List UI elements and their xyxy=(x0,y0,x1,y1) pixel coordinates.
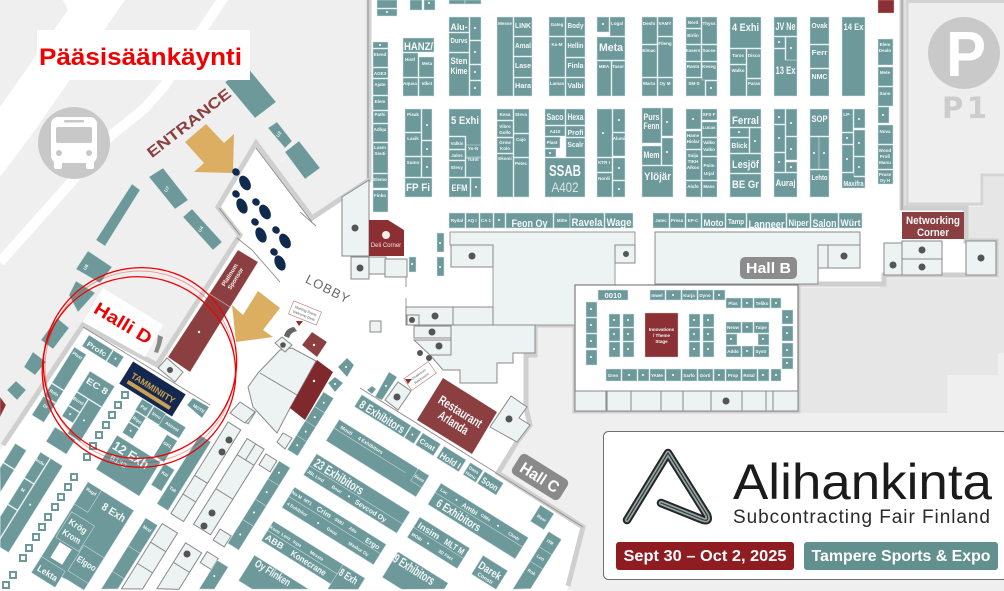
deli corner xyxy=(369,220,404,256)
hall C booths: Darek xyxy=(476,560,504,583)
hall C booths: 6 Exhibitors xyxy=(434,496,484,535)
restaurant arlanda xyxy=(417,378,497,454)
lobby label: LOBBY xyxy=(303,271,353,307)
Hall A top booths: Gateg xyxy=(551,22,564,27)
Hall A top booths: Oy H xyxy=(880,178,890,183)
lobby signs: Welcome Desk xyxy=(292,310,316,322)
hall C booths: SMU xyxy=(334,517,345,526)
Hall A top booths: Paras xyxy=(748,81,761,86)
hall C booths: Rexr xyxy=(536,514,547,523)
Hall A lower booths: Saija xyxy=(688,153,699,158)
Hall A top booths: Lase xyxy=(515,63,531,70)
hall D booths: Reln xyxy=(49,388,60,398)
arrow: entrance xyxy=(185,124,234,173)
outdoor teal stands xyxy=(0,68,320,417)
Hall A lower booths: Valko xyxy=(703,140,715,145)
hall C booths: 23 Exhibitors xyxy=(311,455,367,498)
Hall A lower booths: Fenn xyxy=(644,121,660,131)
hall C booths: Maskur Oy xyxy=(348,541,370,557)
hall b label xyxy=(740,257,797,279)
hall C booths: No M xyxy=(291,490,303,500)
Hall A top booths: Idkct xyxy=(422,81,433,86)
hall b lower room: Taipe xyxy=(755,325,767,330)
entrance label: ENTRANCE xyxy=(144,85,235,161)
outdoor teal stands: U4 xyxy=(197,225,205,233)
hall b lower room: Neuw xyxy=(727,325,739,330)
hall b lower room: Inwel xyxy=(651,293,663,298)
subtitle: Subcontracting Fair Finland xyxy=(733,507,990,528)
Hall A lower booths: Jalos xyxy=(451,153,463,158)
hall b lower room: 0010 xyxy=(604,293,622,300)
Hall A lower booths: Maxifra xyxy=(844,181,864,188)
hall D booths: Lekta xyxy=(35,563,60,584)
hall C booths: Soon xyxy=(480,475,500,493)
Hall A lower booths: Pisak xyxy=(407,112,419,117)
hall D booths: Pal xyxy=(140,404,148,412)
Hall A lower booths: Grow xyxy=(499,140,511,145)
hall c label: Hall C xyxy=(516,460,562,497)
Hall A lower booths xyxy=(405,108,865,197)
Hall A top booths: Etend xyxy=(374,52,386,57)
Hall A lower booths: Yo-N xyxy=(468,146,478,151)
restaurant arlanda: Restaurant xyxy=(436,392,486,431)
icon: parking P xyxy=(928,17,1000,90)
Hall A top booths: Thyss xyxy=(702,21,716,26)
hall b lower room: Gorti xyxy=(700,373,710,378)
Hall A lower booths: KTR I xyxy=(598,160,610,165)
hall b label: Hall B xyxy=(746,260,791,277)
hall b lower room: Addo xyxy=(727,349,739,354)
hall C booths: 4 Exhibitors xyxy=(356,436,384,456)
Hall A top booths xyxy=(373,0,894,212)
hall bottom row booths: Presa xyxy=(671,218,684,223)
Hall A top booths: Pathi xyxy=(374,112,386,117)
Hall A lower booths: Sumo xyxy=(407,160,419,165)
Hall A lower booths: Scalr xyxy=(568,142,584,149)
light rooms: Hall A south xyxy=(406,232,996,383)
Hall A lower booths: EFM xyxy=(452,183,468,193)
Hall A top booths: Meta xyxy=(422,61,433,66)
hall b lower room: Stage xyxy=(655,339,668,344)
hall b lower room: Kurja xyxy=(683,293,695,298)
Hall A top booths: Hara xyxy=(515,83,531,90)
Hall A lower booths: Blick xyxy=(732,143,748,150)
hall C booths: Constr xyxy=(476,572,495,587)
hall D booths: GKL xyxy=(162,440,173,450)
hall D booths: Kai xyxy=(161,470,169,478)
logo: triangle mark xyxy=(627,453,708,520)
Hall A top booths: Fileng xyxy=(658,41,672,46)
hall C booths: CIMs xyxy=(480,512,492,523)
Hall A top booths: Keseg xyxy=(702,64,716,69)
Hall A top booths: Easers xyxy=(686,48,701,53)
Hall A top booths: 13 Ex xyxy=(776,65,796,77)
hall C and D booths (rotated grid) xyxy=(0,251,571,591)
hall C booths: Hanu xyxy=(465,470,477,480)
Hall A top booths: NMC xyxy=(812,74,828,81)
hall D and C light rooms xyxy=(121,401,295,591)
hall D booths: Ragd xyxy=(85,487,98,497)
Hall A top booths: Wood xyxy=(879,148,891,153)
service icons in hall D rooms xyxy=(184,436,232,558)
Hall A top booths: Adlqu xyxy=(374,127,387,132)
arrow: into lobby xyxy=(232,291,280,342)
Hall A top booths: Profi xyxy=(880,154,890,159)
Hall A lower booths: Poim xyxy=(703,163,715,168)
Hall A top booths: Lamas xyxy=(550,81,565,86)
outdoor teal stands: U2 xyxy=(275,130,283,138)
hall D small square stands xyxy=(3,392,128,588)
hall bottom row booths: Lanneer xyxy=(748,219,785,231)
hall bottom row booths: Würt xyxy=(840,218,860,228)
hall C booths: Ergo xyxy=(363,537,381,552)
Hall A top booths: HANZ/ xyxy=(404,41,433,53)
hall C booths: Dass xyxy=(468,465,480,475)
Hall A lower booths: 5 Exhi xyxy=(451,115,479,127)
Hall A lower booths: Auraj xyxy=(776,178,796,188)
hall C booths: 8 Exhibitors xyxy=(357,397,408,436)
badge: dates: Sept 30 – Oct 2, 2025 xyxy=(624,548,787,565)
Hall A top booths: Birlin xyxy=(687,33,699,38)
logo: Tamminiity xyxy=(119,362,186,416)
hall D booths: Ripp xyxy=(132,415,143,425)
Hall A top booths: Taros xyxy=(732,53,744,58)
hall D booths: Elgoo xyxy=(75,554,98,574)
lobby signs xyxy=(288,301,436,390)
lobby signs: Meeting Points xyxy=(294,305,317,317)
Hall A top booths: Mete xyxy=(880,70,891,75)
Hall A top booths: 4 Exhi xyxy=(732,22,759,34)
Hall A lower booths: BE Gr xyxy=(732,179,760,191)
hall bottom row booths: Salon xyxy=(812,218,837,230)
lobby teal booths xyxy=(409,233,444,276)
Hall A lower booths: Lehto xyxy=(812,175,828,182)
Hall A top booths: Lasm xyxy=(374,145,386,150)
inner wall lines xyxy=(83,0,902,527)
hall C booths: Goua xyxy=(326,526,339,537)
Hall A top booths: Ka-M xyxy=(552,42,563,47)
hall D booths: M xyxy=(20,487,26,493)
hall D booths: Profc xyxy=(85,341,108,359)
Hall A top booths: Manu xyxy=(879,160,891,165)
hall D booths: EC 8 xyxy=(84,376,110,397)
roads xyxy=(0,0,1004,413)
Hall A top booths: Sacse xyxy=(702,48,716,53)
hall D booths: Dr xyxy=(42,403,49,410)
hall bottom row booths: Niper xyxy=(788,218,809,228)
hall c label xyxy=(510,452,570,502)
Hall A top booths: Sten xyxy=(450,56,468,66)
hall D booths: Almost xyxy=(164,420,180,433)
Hall A lower booths: Hexa xyxy=(568,112,584,122)
hall C booths: Inpa xyxy=(292,539,303,548)
hall D booths: Krom xyxy=(60,527,83,546)
hall C booths: 3D Fact xyxy=(437,549,454,562)
Hall A lower booths: Lucas xyxy=(702,125,716,130)
Hall A top booths: Ferr xyxy=(812,50,828,57)
lobby signs: Restrooms xyxy=(414,372,430,385)
hall C booths: Lenz xyxy=(280,532,292,542)
Hall A top booths: Hiotl xyxy=(405,57,415,62)
Hall A lower booths: FP Fi xyxy=(406,182,430,194)
Hall A top booths: Oy M xyxy=(659,81,671,86)
Hall A top booths: Nova xyxy=(879,129,891,134)
hall C booths: Clwdr xyxy=(507,531,521,542)
hall b lower room: Rotal xyxy=(743,373,755,378)
hall D booths: Inno xyxy=(151,411,162,420)
Hall A lower booths: Nordi xyxy=(598,176,610,181)
hall bottom row booths: Mitte xyxy=(557,218,568,223)
Hall A lower booths: Hiolar xyxy=(687,139,700,144)
Hall A lower booths: Alumi xyxy=(613,136,625,141)
Hall A top booths: 14 Ex xyxy=(844,22,864,32)
parking label P1: P 1 xyxy=(942,91,987,125)
Hall A top booths: LINK xyxy=(515,23,531,30)
hall C booths: MOBi xyxy=(410,532,423,542)
lobby signs: Cloakroom xyxy=(411,368,427,381)
Hall A lower booths: SSAB xyxy=(549,163,581,180)
parking area outline xyxy=(907,2,1004,204)
Hall A top booths: AGE3 xyxy=(374,71,387,76)
Hall A top booths: Elemo xyxy=(373,177,387,182)
Hall A lower booths: A402 xyxy=(552,179,579,195)
Hall A top booths: VAMY xyxy=(659,21,671,26)
hall C booths: Insim xyxy=(416,520,442,542)
hall C booths: ABB xyxy=(263,532,286,552)
hall bottom row booths: Rydal xyxy=(451,218,463,223)
networking corner: Networking xyxy=(906,215,960,227)
hall C booths: MLT M xyxy=(442,537,466,557)
hall C booths: JBL Lind xyxy=(306,469,325,483)
hall C booths xyxy=(215,376,571,591)
lobby central block xyxy=(158,327,316,449)
outdoor teal stands: U8 xyxy=(82,263,90,271)
Hall A top booths: Rants xyxy=(687,64,700,69)
Hall A lower booths: Petec xyxy=(515,161,527,166)
Hall A lower booths: Purs xyxy=(644,112,660,122)
hall bottom row booths: Jatec xyxy=(655,218,667,223)
badge: venue: Tampere Sports & Expo xyxy=(812,548,990,565)
logo: Tamminiity: TAMMINIITY xyxy=(129,371,177,406)
hall bottom row booths: CA 1 xyxy=(481,218,492,223)
label: main entrance: Pääsisäänkäynti xyxy=(39,44,242,71)
badge: venue xyxy=(804,542,998,570)
Hall A lower booths: Mem xyxy=(644,150,660,160)
hall D booths: 8 Exh xyxy=(99,501,128,525)
badge: dates xyxy=(616,542,794,570)
hall C booths: Allo xyxy=(348,526,358,534)
hall b lower room: Gren xyxy=(608,373,618,378)
Hall A lower booths: Plast xyxy=(547,140,558,145)
MOTE stand xyxy=(187,398,209,418)
hall C booths: Konecrane xyxy=(289,548,328,578)
Hall A top booths: Walko xyxy=(731,68,745,73)
Hall A lower booths: A410 xyxy=(550,129,561,134)
hall D booths: B132 xyxy=(108,455,128,470)
Hall A lower booths: Steva xyxy=(515,112,527,117)
Hall A lower booths: Turol xyxy=(468,157,478,162)
MOTE stand: MOTE xyxy=(192,403,206,414)
Hall A top booths: Alu- xyxy=(450,22,468,32)
hall C booths: Kone xyxy=(269,525,282,535)
Hall A top booths: Valbi xyxy=(568,83,584,90)
Hall A top booths: Meta xyxy=(599,42,624,54)
hall D booths: Bond xyxy=(72,396,85,406)
Hall A lower booths: Laxik xyxy=(407,136,419,141)
icon: parking P: P xyxy=(946,18,986,90)
hall C booths: Rok xyxy=(527,568,537,577)
label: Halli D xyxy=(83,288,163,357)
hall C booths: 4 Exhibitor xyxy=(286,501,309,518)
Hall A lower booths: LP- xyxy=(843,112,851,117)
Hall A top booths: JV Ne xyxy=(776,21,796,33)
Hall A lower booths: Ekomi xyxy=(498,156,512,161)
Hall A lower booths: Ferral xyxy=(732,115,759,127)
brown stands in lobby xyxy=(168,250,333,420)
Hall A top booths: Seuti xyxy=(374,151,386,156)
Hall A top booths: Finla xyxy=(568,63,584,70)
Hall A lower booths: Gollo xyxy=(499,130,511,135)
Hall A top booths: Amal xyxy=(515,43,531,50)
hall b lower room: Innovations xyxy=(649,327,675,332)
Hall A top booths: Pruse xyxy=(879,172,892,177)
Hall A lower booths: Kolo xyxy=(500,146,510,151)
hall bottom row booths: Moto xyxy=(704,218,724,228)
hall bottom row booths: Feon Oy xyxy=(512,218,548,230)
Hall A lower booths: Ylöjär xyxy=(644,171,672,183)
Hall A lower booths: Lesjöf xyxy=(732,159,759,171)
lobby south-east rooms and booths xyxy=(328,358,530,442)
hall b lower room: Prop xyxy=(728,373,738,378)
hall b lower room: Plas xyxy=(728,301,738,306)
Hall A top booths: Finko xyxy=(374,193,386,198)
Hall A lower booths: Vibro xyxy=(499,124,511,129)
restaurant arlanda: Arlanda xyxy=(436,407,472,438)
brown stands in lobby: Platinum xyxy=(221,263,240,288)
Hall A top booths: Deshi xyxy=(643,21,655,26)
hall C booths: Hold I xyxy=(438,450,463,471)
hall C booths: Leo xyxy=(536,553,546,562)
title: Alihankinta: Alihankinta xyxy=(733,454,992,510)
hall bottom row booths: Ravela xyxy=(572,217,603,229)
hall b lower room: / Theme xyxy=(653,333,670,338)
hall C booths: ITR xyxy=(546,538,555,547)
hall bottom row booths: Tamp xyxy=(728,219,744,226)
hall bottom row booths xyxy=(449,213,862,231)
Hall A top booths: Nord xyxy=(688,20,698,25)
Hall A lower booths: Hame xyxy=(687,133,700,138)
light rooms: lobby north xyxy=(342,180,407,332)
hall D booths: Mod xyxy=(142,524,153,534)
hall D booths: Plast xyxy=(71,351,84,361)
deli corner: Deli Corner xyxy=(371,243,401,249)
Hall A top booths: Durvs xyxy=(450,38,468,45)
hall bottom row booths: EP-C xyxy=(688,218,699,223)
label: main entrance xyxy=(37,30,250,80)
Hall A lower booths: SFS F xyxy=(703,112,716,117)
Hall A lower booths: Kesa xyxy=(500,112,511,117)
hall b lower room xyxy=(575,285,798,411)
Hall A top booths: Hellin xyxy=(568,43,584,50)
outdoor teal stands: U1 xyxy=(279,155,287,163)
hall b lower room: Systr xyxy=(755,349,767,354)
Hall A top booths: Logal xyxy=(611,21,623,26)
hall bottom row booths: AQ I xyxy=(467,218,477,223)
Hall A lower booths: Valkis xyxy=(451,141,464,146)
Hall A lower booths: SOP xyxy=(812,114,828,124)
hall C booths: Crim xyxy=(315,506,332,520)
hall C booths: MT1 xyxy=(303,497,313,507)
Hall A lower booths: Alufo xyxy=(687,184,699,189)
outdoor teal stands: U7 xyxy=(163,185,171,193)
panel: event info xyxy=(604,432,1004,580)
Hall A top booths: Messe xyxy=(498,21,512,26)
Hall A top booths: Ovak xyxy=(812,23,828,30)
hall b lower room: YAMe xyxy=(651,373,664,378)
hall C booths: Bouc xyxy=(331,484,343,495)
hall D booths: Tak xyxy=(168,485,178,494)
hall b lower room: Teliko xyxy=(756,301,769,306)
hall b lower room: Dyno xyxy=(699,293,711,298)
Hall A top booths: Body xyxy=(568,23,584,30)
Hall A top booths: Dealo xyxy=(879,48,891,53)
hall D booths: 12 Exh xyxy=(110,438,152,472)
Hall A top booths: Warta xyxy=(643,81,656,86)
brown stands in lobby: Sponsor xyxy=(227,267,246,291)
label: Halli D: Halli D xyxy=(90,298,156,348)
Hall A top booths: MBA xyxy=(599,64,610,69)
hall C booths: Mouti xyxy=(339,425,354,437)
hall C booths: Ambi xyxy=(460,502,479,517)
Hall A top booths: Disco xyxy=(748,53,760,58)
hall bottom row booths: Wage xyxy=(606,217,632,229)
icon: bus xyxy=(38,107,110,179)
hall D booths: Krög xyxy=(67,517,89,536)
Hall A lower booths: Saco xyxy=(546,112,564,122)
hall C booths: Sova xyxy=(413,473,426,484)
hall C booths: Coat xyxy=(418,438,437,453)
hall C booths: Loc xyxy=(439,487,449,496)
Hall A lower booths: Elevy xyxy=(451,165,463,170)
Hall A top booths: Tasor xyxy=(612,64,624,69)
hall C booths: Sevcod Oy xyxy=(353,499,388,524)
Hall A lower booths: Cajo xyxy=(516,137,526,142)
Hall A top booths: Elmac xyxy=(642,48,656,53)
icon: footprints xyxy=(231,167,293,272)
hall D booths: Indu xyxy=(35,457,46,467)
hall C booths: Messte xyxy=(309,550,325,562)
Hall A top booths: Sano xyxy=(879,91,891,96)
Hall A lower booths: Valko xyxy=(703,147,715,152)
networking corner: Corner xyxy=(917,227,950,239)
Hall A top booths: SM-S xyxy=(688,81,700,86)
networking corner xyxy=(902,212,964,239)
Hall A top booths: Kime xyxy=(450,66,468,76)
hall b lower room: Sarfo xyxy=(683,373,695,378)
Hall A lower booths: Urjal xyxy=(704,171,714,176)
Hall A top booths: Elem xyxy=(375,99,385,104)
Hall A top booths: Elem xyxy=(880,42,890,47)
Hall A lower booths: Profi xyxy=(568,130,584,137)
Hall A lower booths: Alkos xyxy=(687,165,700,170)
Hall A lower booths: Mass xyxy=(703,184,715,189)
highlight circle: Halli D xyxy=(12,236,268,494)
Hall A top booths: Aqusa xyxy=(403,81,417,86)
hall D booths xyxy=(0,332,293,591)
Hall A top booths: Ajato xyxy=(374,82,386,87)
Hall A lower booths: TIKH xyxy=(688,159,698,164)
